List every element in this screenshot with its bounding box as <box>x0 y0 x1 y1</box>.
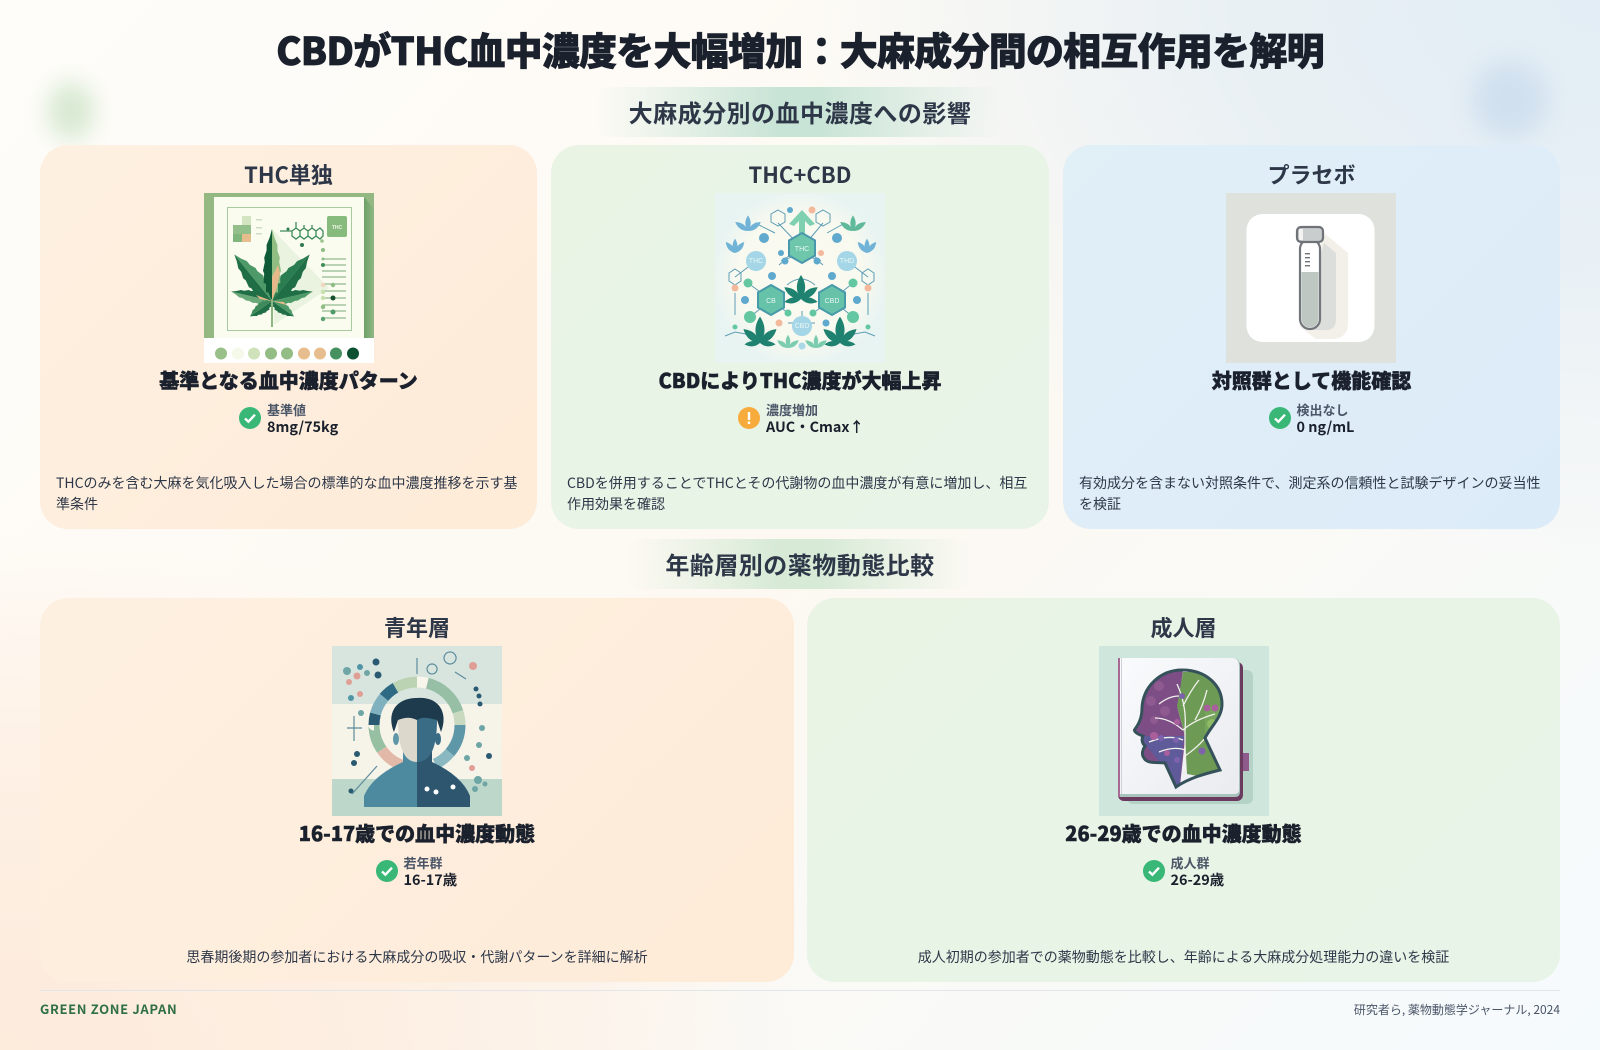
panel: adults <box>807 598 1560 982</box>
stat value: 26-29歳 <box>1170 869 1224 890</box>
image: molecule network: THC <box>749 258 763 265</box>
panel title: 青年層 <box>384 611 450 643</box>
image: molecule network: CBD <box>795 323 809 330</box>
image: cannabis leaf document <box>204 193 374 363</box>
sub heading: CBDによりTHC濃度が大幅上昇 <box>658 365 942 394</box>
stat value: AUC・Cmax↑ <box>766 416 864 437</box>
image: molecule network <box>715 193 885 363</box>
stat: baseline <box>239 400 338 437</box>
stat label: 濃度増加 <box>766 400 818 419</box>
sub heading: 16-17歳での血中濃度動態 <box>299 818 535 847</box>
image: test tube <box>1226 193 1396 363</box>
panel: adolescents <box>40 598 794 982</box>
description: THCのみを含む大麻を気化吸入した場合の標準的な血中濃度推移を示す基準条件 <box>56 473 518 514</box>
image: brain notebook <box>1099 646 1269 816</box>
stat value: 0 ng/mL <box>1296 416 1354 437</box>
stat label: 成人群 <box>1170 853 1210 872</box>
panel title: THC+CBD <box>749 158 851 190</box>
description: 成人初期の参加者での薬物動態を比較し、年齢による大麻成分処理能力の違いを検証 <box>918 947 1449 967</box>
section heading: age comparison: 年齢層別の薬物動態比較 <box>665 546 935 581</box>
section heading: age comparison <box>628 539 972 589</box>
stat: not detected <box>1269 400 1354 437</box>
panel title: THC単独 <box>244 158 333 190</box>
icon: warning <box>738 407 760 429</box>
description: CBDを併用することでTHCとその代謝物の血中濃度が有意に増加し、相互作用効果を確認 <box>567 473 1027 514</box>
sub heading: 26-29歳での血中濃度動態 <box>1065 818 1302 847</box>
image: molecule network: THC <box>795 246 809 253</box>
panel: placebo <box>1063 145 1560 529</box>
icon: check <box>1143 860 1165 882</box>
title: CBDがTHC血中濃度を大幅増加：大麻成分間の相互作用を解明 <box>276 21 1324 76</box>
panel: THC alone <box>40 145 537 529</box>
image: molecule network: CBD <box>825 298 839 305</box>
stat: concentration increase <box>738 400 864 437</box>
image: young person <box>332 646 502 816</box>
icon: check <box>1269 407 1291 429</box>
section heading: cannabinoid effect <box>596 87 1004 137</box>
sub heading: 対照群として機能確認 <box>1212 365 1411 394</box>
stat: adult group <box>1143 853 1224 890</box>
image: molecule network: THD <box>840 258 854 265</box>
description: 有効成分を含まない対照条件で、測定系の信頼性と試験デザインの妥当性を検証 <box>1079 473 1540 514</box>
image: cannabis leaf document: THC <box>331 225 342 231</box>
footer citation: 研究者ら, 薬物動態学ジャーナル, 2024 <box>1354 1001 1560 1018</box>
icon: check <box>239 407 261 429</box>
image: molecule network: CB <box>766 298 776 305</box>
decorative blob: green <box>48 82 94 140</box>
panel title: 成人層 <box>1150 611 1216 643</box>
icon: check <box>376 860 398 882</box>
section heading: cannabinoid effect: 大麻成分別の血中濃度への影響 <box>629 94 971 129</box>
stat label: 検出なし <box>1296 400 1349 419</box>
decorative blob: blue <box>1472 62 1548 138</box>
footer brand: GREEN ZONE JAPAN <box>40 999 177 1018</box>
stat: young group <box>376 853 457 890</box>
stat label: 若年群 <box>404 853 443 872</box>
stat value: 8mg/75kg <box>267 416 338 437</box>
sub heading: 基準となる血中濃度パターン <box>159 365 418 394</box>
panel title: プラセボ <box>1267 158 1356 190</box>
stat label: 基準値 <box>267 400 306 419</box>
description: 思春期後期の参加者における大麻成分の吸収・代謝パターンを詳細に解析 <box>186 947 648 967</box>
panel: THC+CBD <box>551 145 1049 529</box>
stat value: 16-17歳 <box>404 869 457 890</box>
